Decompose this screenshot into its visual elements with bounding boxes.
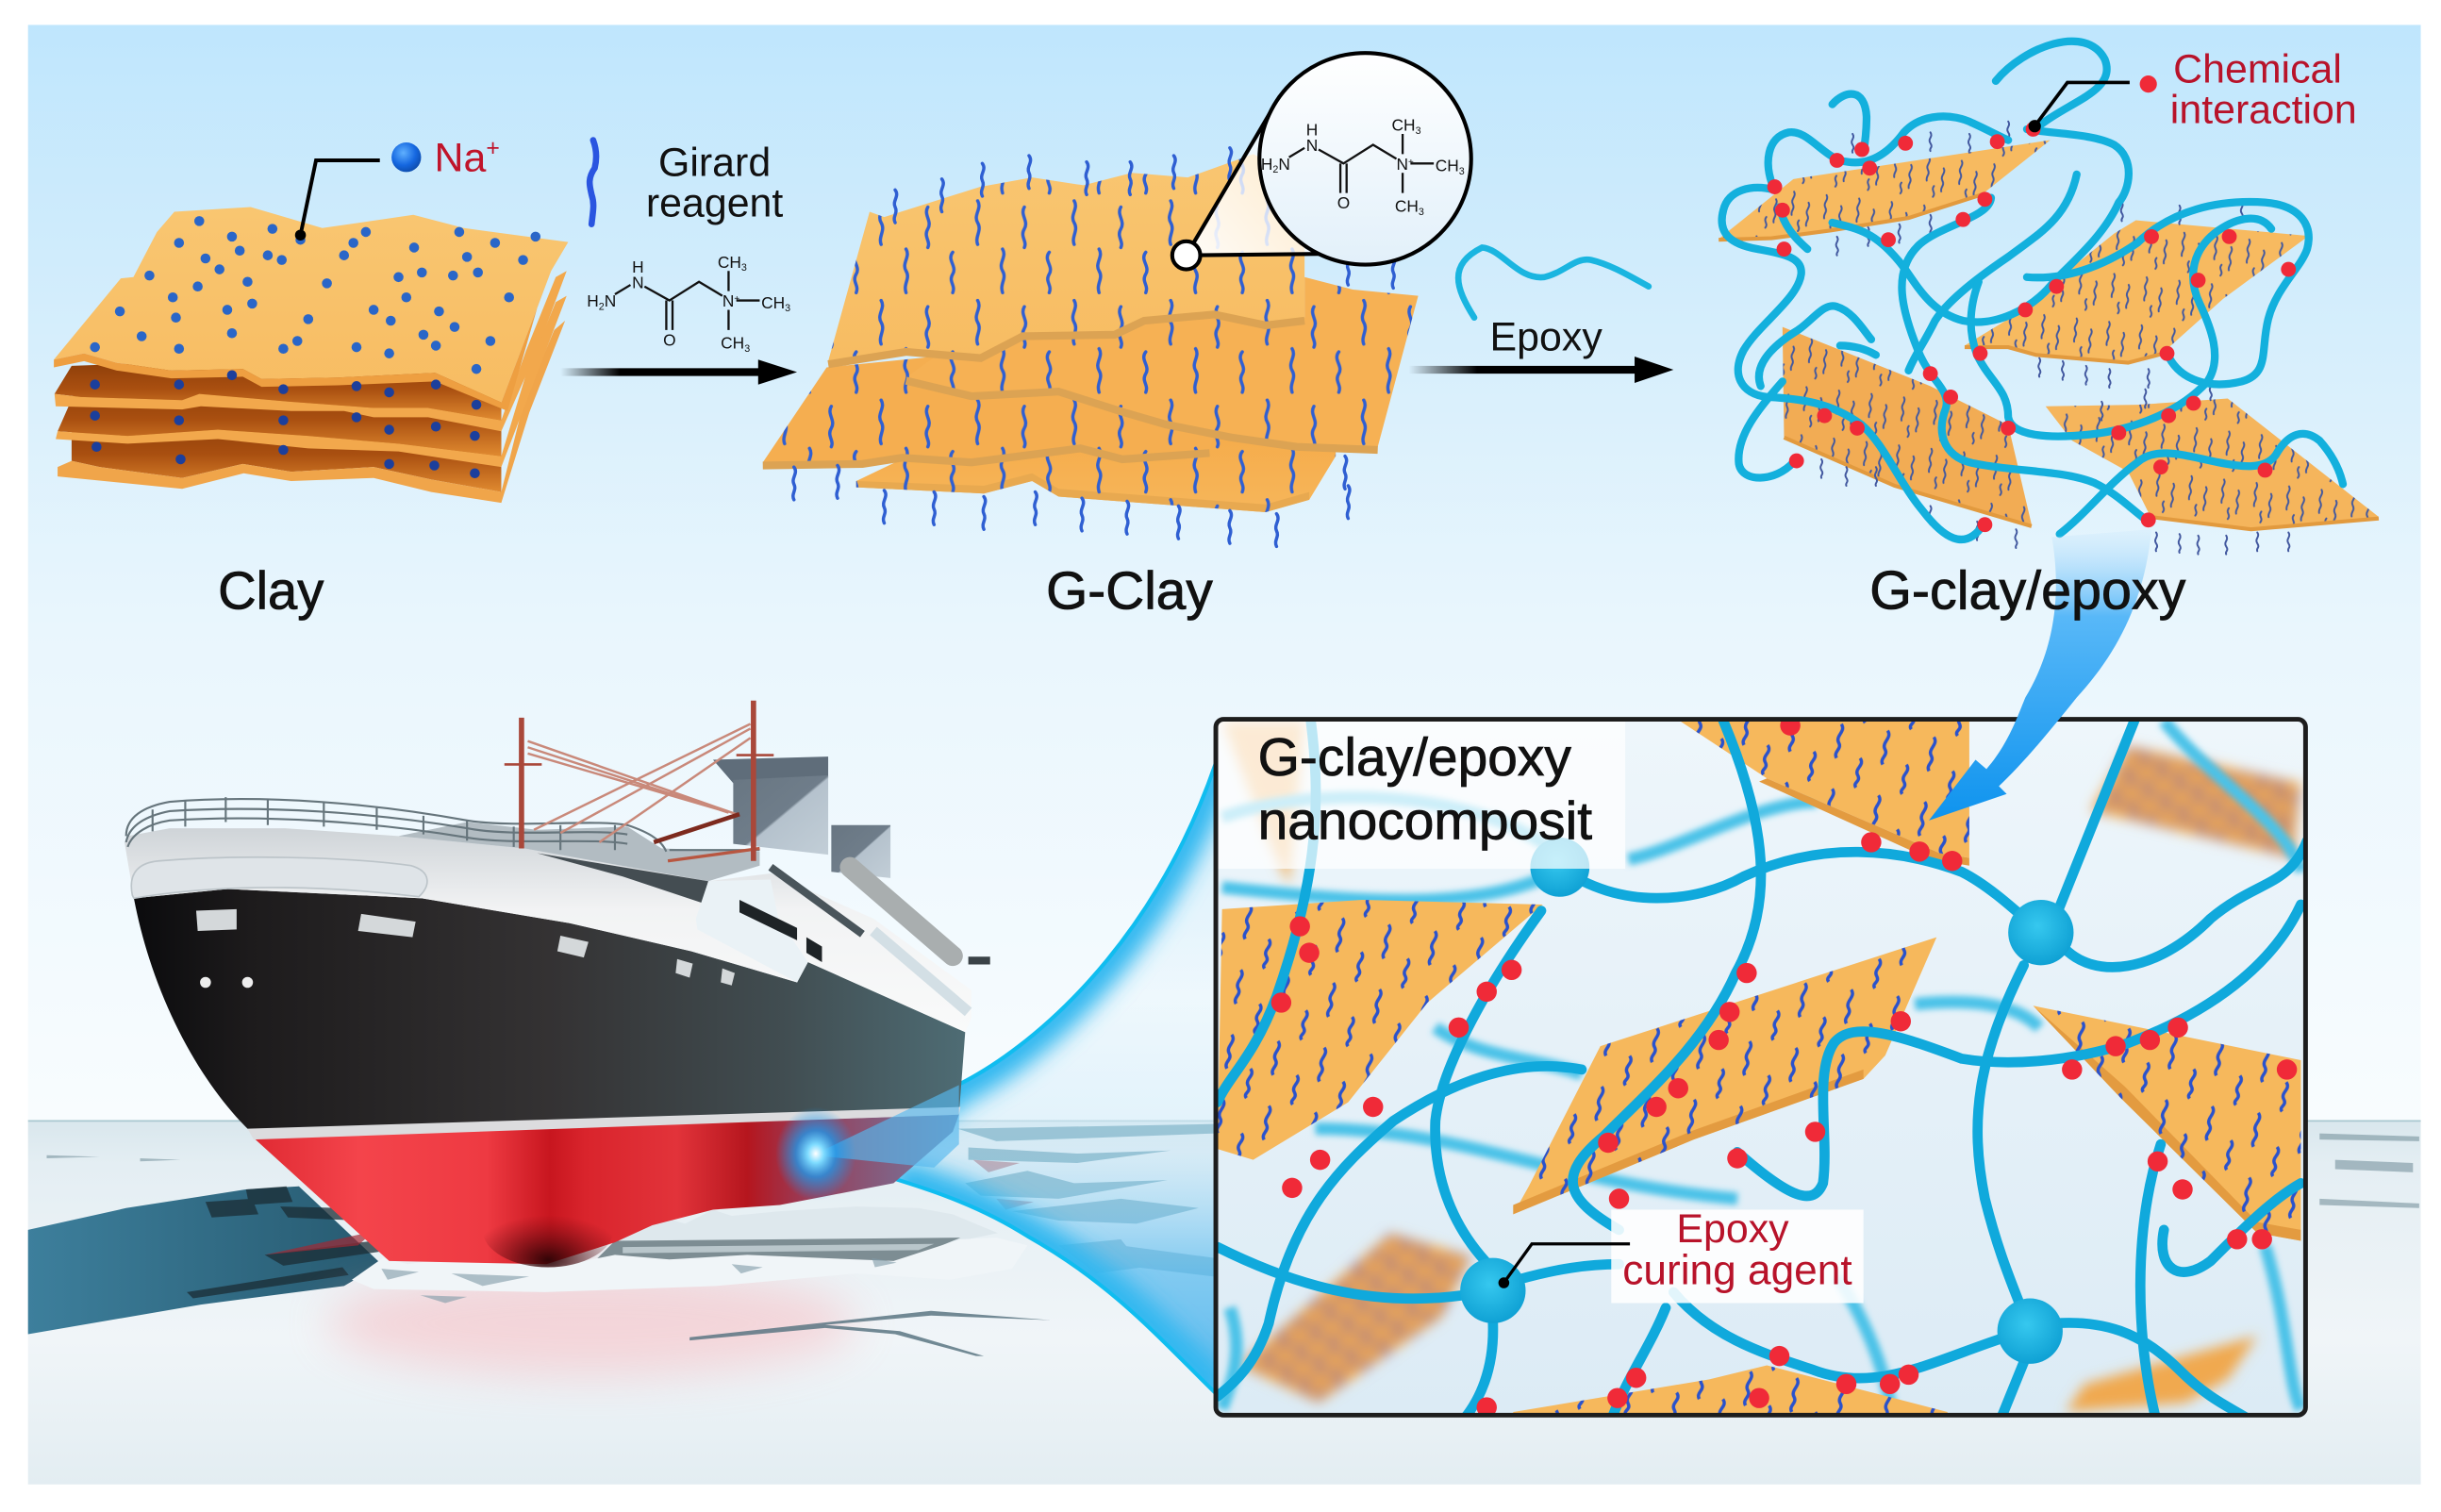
blurred background platelets: [1222, 721, 2300, 1412]
molecule: Girard reagent structure: CH: [721, 334, 744, 353]
molecule: Girard reagent structure: [587, 253, 790, 355]
molecule: Girard reagent structure: H: [632, 258, 644, 276]
molecule: Girard reagent structure: +: [734, 294, 739, 305]
fourth layer: [58, 321, 565, 503]
masts and rigging: [505, 701, 773, 861]
molecule: Girard reagent structure: N: [632, 273, 644, 291]
panel title backing: [1218, 721, 1625, 869]
clay stack: [54, 208, 568, 503]
stage label: Clay: Clay: [218, 560, 324, 620]
reagent chains at platelet edges: [1820, 122, 2289, 555]
molecule: Girard reagent structure: N: [722, 291, 734, 310]
white superstructure: [125, 828, 971, 1032]
waterline: [247, 1107, 960, 1139]
clay platelets: [1719, 141, 2379, 529]
sharp clay platelets: [1218, 721, 2300, 1424]
red keel: [254, 1115, 959, 1264]
third layer: [56, 296, 567, 467]
deck clutter: [399, 822, 759, 881]
glow point: [775, 1107, 856, 1201]
Na+ callout: +: [486, 136, 500, 161]
molecule: magnified Girard structure: [1261, 116, 1465, 218]
sea ice: [28, 1121, 2421, 1485]
molecule: Girard reagent structure: 2: [599, 301, 605, 312]
molecule: magnified Girard structure: 2: [1272, 164, 1278, 175]
chemical interaction callout: Chemical: [2173, 46, 2342, 91]
molecule: magnified Girard structure: O: [1337, 193, 1350, 212]
junction nodes: [1460, 838, 2073, 1364]
molecule: Girard reagent structure: 3: [744, 343, 750, 355]
panel title: nanocomposit: [1258, 791, 1592, 852]
panel background: [1219, 902, 2303, 1413]
molecule: magnified Girard structure: N: [1397, 155, 1408, 174]
molecule: magnified Girard structure: 3: [1416, 125, 1421, 137]
molecule: magnified Girard structure: CH: [1395, 196, 1419, 215]
molecule: magnified Girard structure: H: [1306, 121, 1318, 140]
reagent chains at sheet edges: [793, 148, 1395, 546]
molecule: magnified Girard structure: N: [1306, 136, 1318, 155]
bow bulwark panel: [131, 857, 427, 898]
molecule: magnified Girard structure: 3: [1419, 207, 1424, 218]
arrow: clay to G-clay: [560, 359, 797, 385]
stage label: G-clay/epoxy: G-clay/epoxy: [1869, 560, 2186, 621]
cone light over hull: [813, 1085, 959, 1168]
molecule: magnified Girard structure: 3: [1459, 166, 1465, 177]
epoxy curing agent callout: [1499, 1206, 1852, 1294]
ice shards inside view of zoom cone: [957, 1124, 1216, 1276]
panel border: [1216, 720, 2305, 1415]
Girard reagent label: [589, 141, 783, 225]
molecule: Girard reagent structure: CH: [718, 253, 741, 272]
Na+ callout: Na: [434, 136, 486, 181]
ship: [125, 701, 1027, 1303]
funnels: [713, 756, 890, 878]
magnifier circle: [1259, 53, 1471, 265]
magnifier anchor point: [1172, 241, 1201, 270]
epoxy label: Epoxy: [1490, 314, 1602, 359]
hull windows: [196, 909, 735, 988]
deck house with windows: [696, 867, 969, 1012]
middle sheet: [906, 277, 1419, 447]
top sheet: [54, 208, 568, 403]
blurred background strands: [1222, 721, 2300, 1409]
G-clay/epoxy cluster: [1719, 42, 2379, 555]
Na+ callout: [295, 136, 500, 241]
chemical interaction points: [1271, 715, 2297, 1418]
arrow: G-clay to epoxy composite: [1409, 357, 1673, 383]
molecule: magnified Girard structure: N: [1278, 155, 1290, 174]
snow slab and foam at bow: [352, 1206, 1027, 1303]
stage label: G-Clay: G-Clay: [1046, 561, 1213, 621]
hull black: [134, 889, 965, 1132]
lower left sheet: [763, 350, 1230, 462]
second layer: [55, 271, 567, 431]
epoxy curing agent callout: curing agent: [1622, 1248, 1852, 1294]
sky gradient: [28, 25, 2421, 1121]
deck railing: [126, 797, 759, 852]
molecule: Girard reagent structure: 3: [741, 262, 747, 274]
zoom cone from ship to panel: [896, 762, 1214, 1394]
molecule: Girard reagent structure: N: [605, 291, 616, 310]
epoxy chain icon: [1458, 247, 1649, 318]
curing agent backing: [1611, 1209, 1864, 1303]
top sheet: [828, 154, 1304, 361]
molecule: Girard reagent structure: CH: [761, 293, 785, 312]
epoxy strands: [1218, 721, 2307, 1420]
nanocomposite panel: [1216, 715, 2307, 1424]
molecule: Girard reagent structure: 3: [785, 303, 790, 314]
molecule: magnified Girard structure: CH: [1436, 157, 1459, 175]
panel title: G-clay/epoxy: [1258, 727, 1571, 788]
epoxy strands: [1722, 42, 2343, 540]
lifeboats: [850, 867, 953, 955]
molecule: magnified Girard structure: CH: [1392, 116, 1416, 135]
molecule: Girard reagent structure: H: [587, 291, 599, 310]
molecule: magnified Girard structure: +: [1408, 158, 1414, 168]
magnifier wedge: [1187, 96, 1326, 256]
chemical interaction points: [1768, 122, 2296, 532]
G-clay sheets: [763, 148, 1419, 546]
Girard reagent label: Girard: [658, 141, 771, 186]
chemical interaction callout: [2029, 46, 2357, 132]
panel title: [1258, 727, 1592, 852]
epoxy curing agent callout: Epoxy: [1676, 1206, 1789, 1252]
bottom sheet: [856, 421, 1336, 512]
blue swoop arrow: [1929, 529, 2151, 821]
molecule: Girard reagent structure: O: [663, 330, 676, 349]
magnifier lines: [1187, 96, 1331, 256]
molecule: magnified Girard structure: H: [1261, 155, 1272, 174]
chemical interaction callout: interaction: [2170, 87, 2357, 132]
Na+ ions on clay: [90, 216, 540, 478]
Girard reagent label: reagent: [646, 180, 783, 225]
